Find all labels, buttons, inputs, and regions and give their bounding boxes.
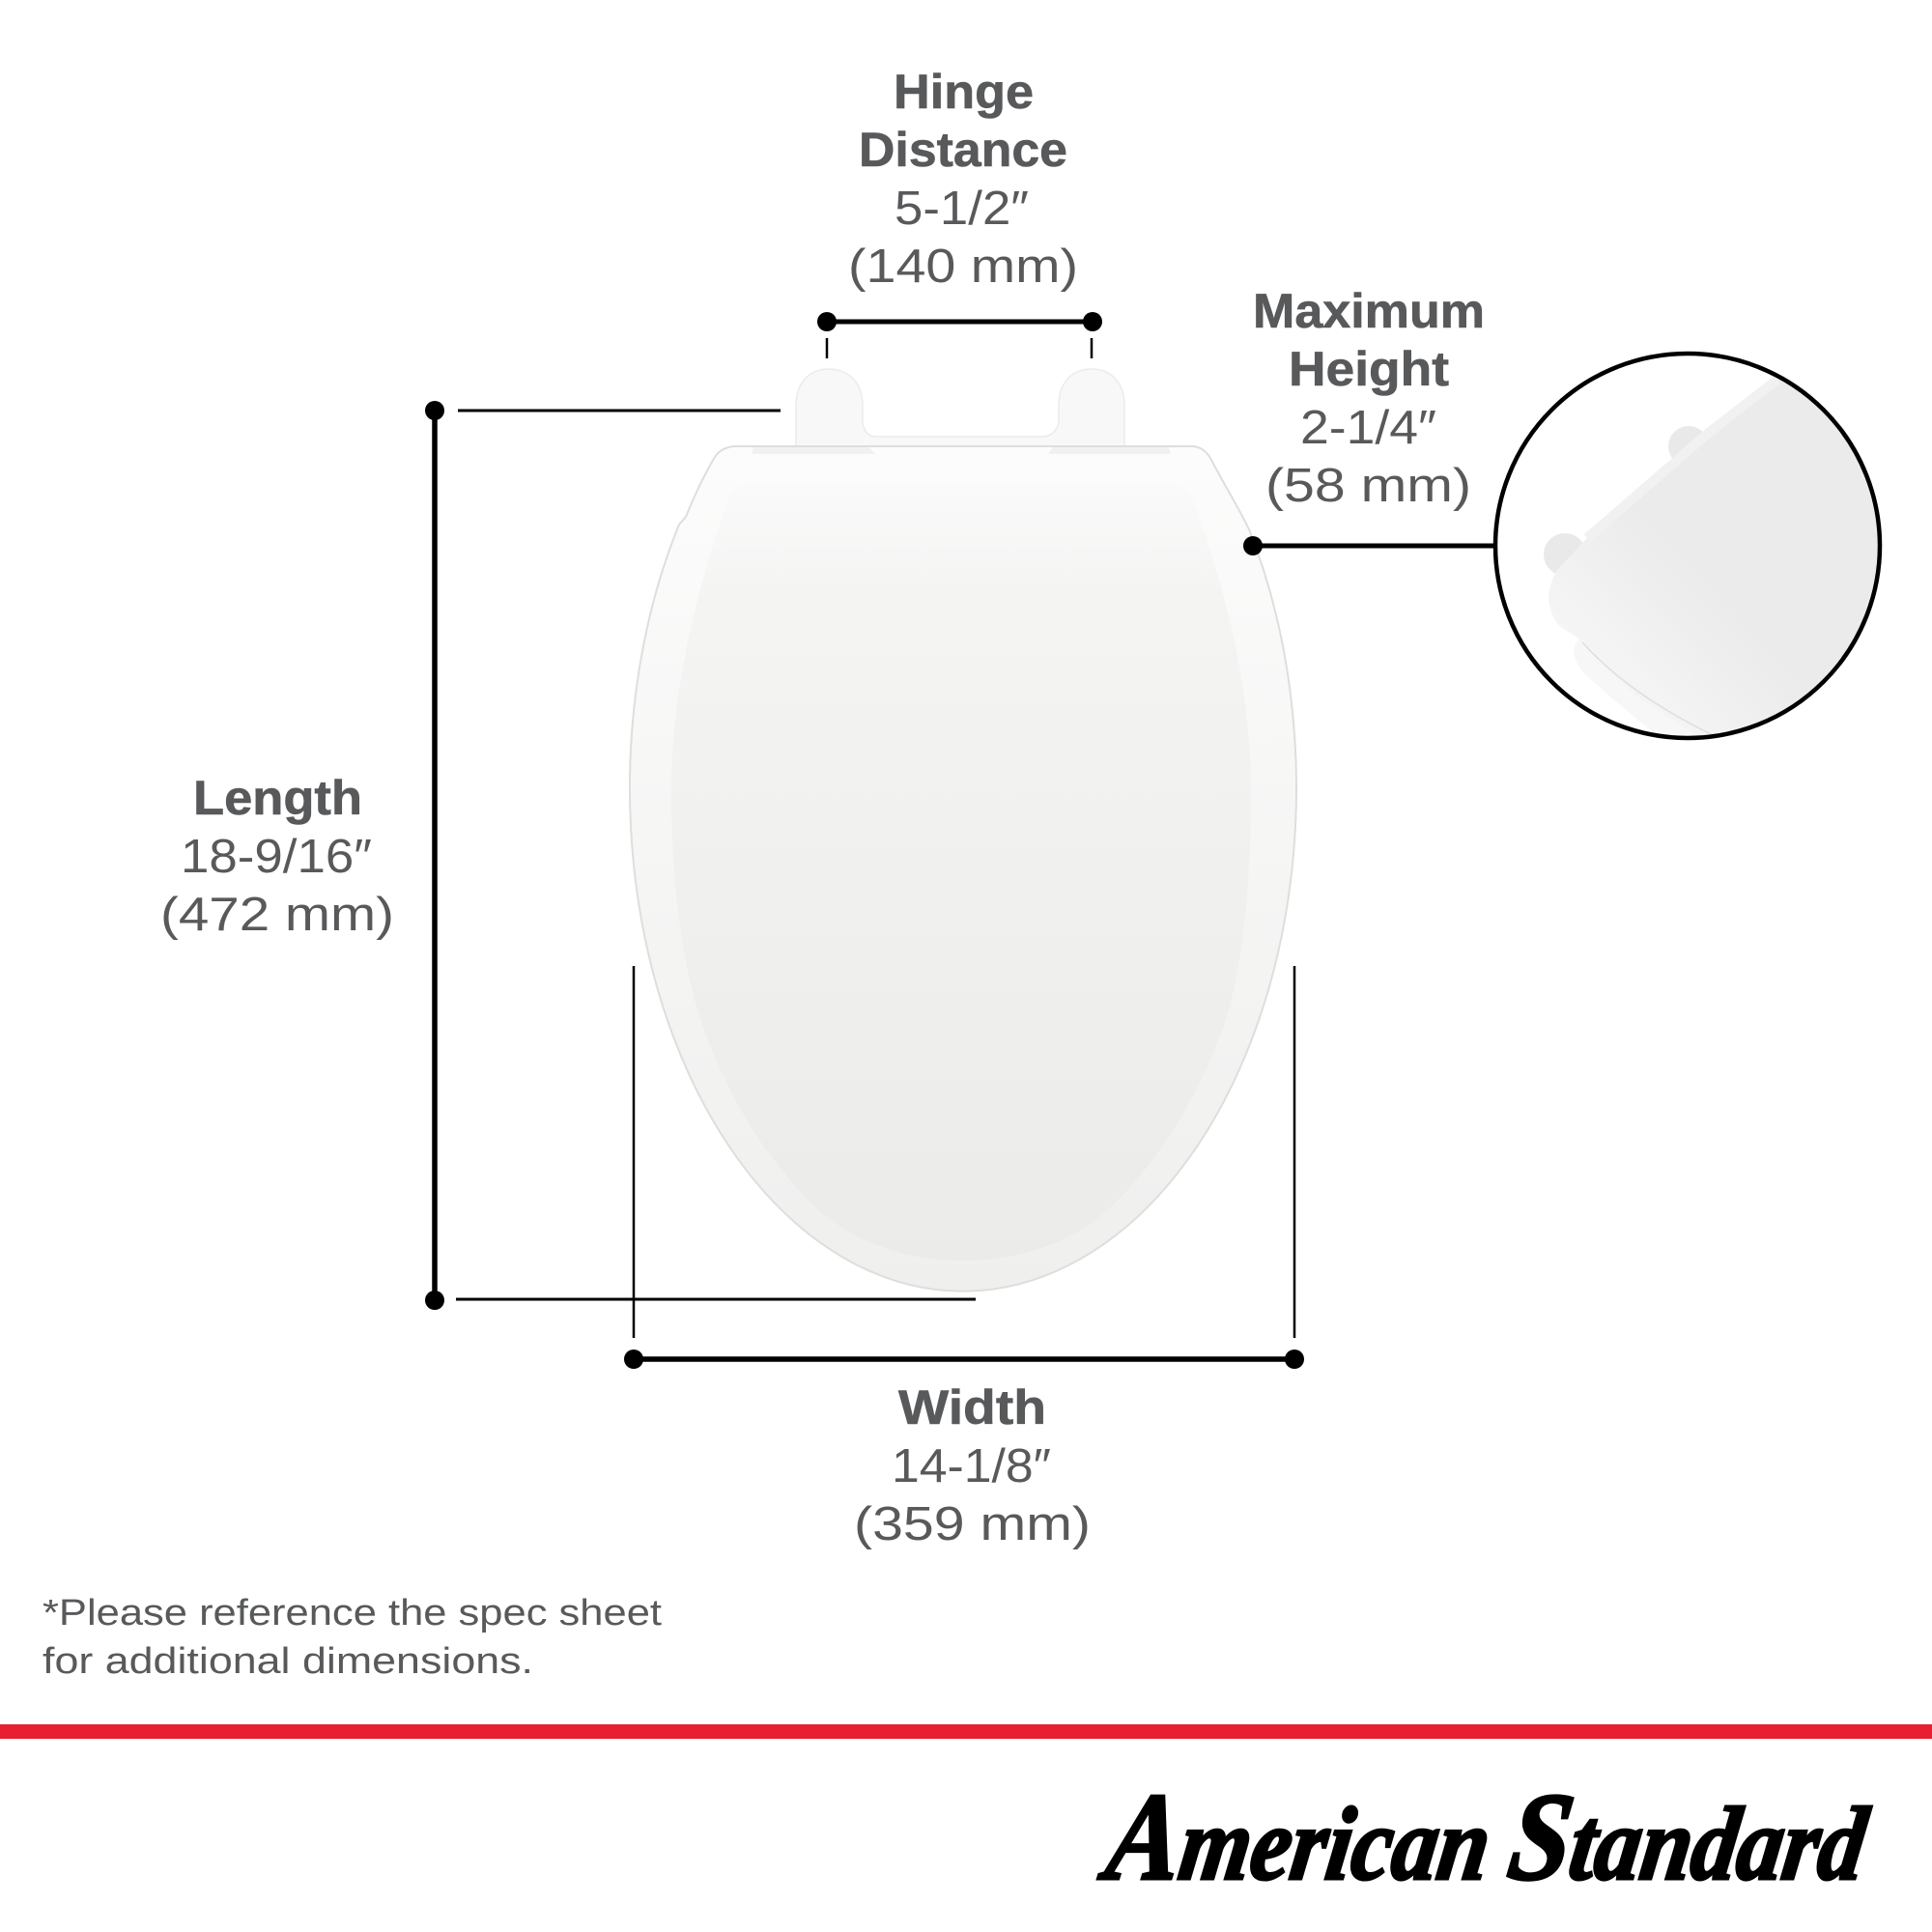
label: length: Length [193, 771, 362, 825]
logo: American Standard: Standard [1501, 1769, 1878, 1907]
label: width: (359 mm) [854, 1498, 1091, 1550]
logo: American Standard: American [1094, 1769, 1500, 1907]
footnote: for additional dimensions. [43, 1641, 533, 1682]
label: hinge distance: Distance [859, 123, 1067, 177]
logo: American Standard [1094, 1769, 1878, 1907]
seat body [630, 446, 1296, 1292]
dimension: width marker [624, 966, 1304, 1369]
label: maximum height: (58 mm) [1265, 460, 1471, 512]
product: toilet seat [630, 369, 1296, 1292]
dimension: hinge distance marker [817, 312, 1102, 358]
label: length: 18-9/16″ [181, 831, 372, 883]
label: hinge distance: 5-1/2″ [895, 183, 1029, 235]
footnote [43, 1593, 663, 1682]
label: hinge distance [848, 65, 1078, 293]
label: maximum height [1253, 284, 1485, 512]
label: hinge distance: (140 mm) [848, 241, 1078, 293]
hinge base strip [752, 447, 1171, 454]
label: width: 14-1/8″ [892, 1440, 1051, 1492]
seat inner plate [671, 483, 1251, 1261]
inset: side view of seat [1495, 354, 1893, 753]
label: length [160, 771, 394, 941]
label: maximum height: 2-1/4″ [1300, 402, 1436, 454]
inset circle border [1495, 354, 1880, 738]
label: maximum height: Maximum [1253, 284, 1485, 338]
dimension: length marker [425, 401, 976, 1310]
label: maximum height: Height [1289, 342, 1449, 396]
red divider bar [0, 1724, 1932, 1739]
label: length: (472 mm) [160, 889, 394, 941]
label: hinge distance: Hinge [894, 65, 1034, 119]
inset seat shapes [1544, 380, 1893, 753]
label: width: Width [898, 1380, 1046, 1435]
dimension: maximum height leader [1243, 536, 1496, 555]
hinge assembly [796, 369, 1124, 454]
label: width [854, 1380, 1091, 1550]
footnote: *Please reference the spec sheet [43, 1593, 663, 1634]
